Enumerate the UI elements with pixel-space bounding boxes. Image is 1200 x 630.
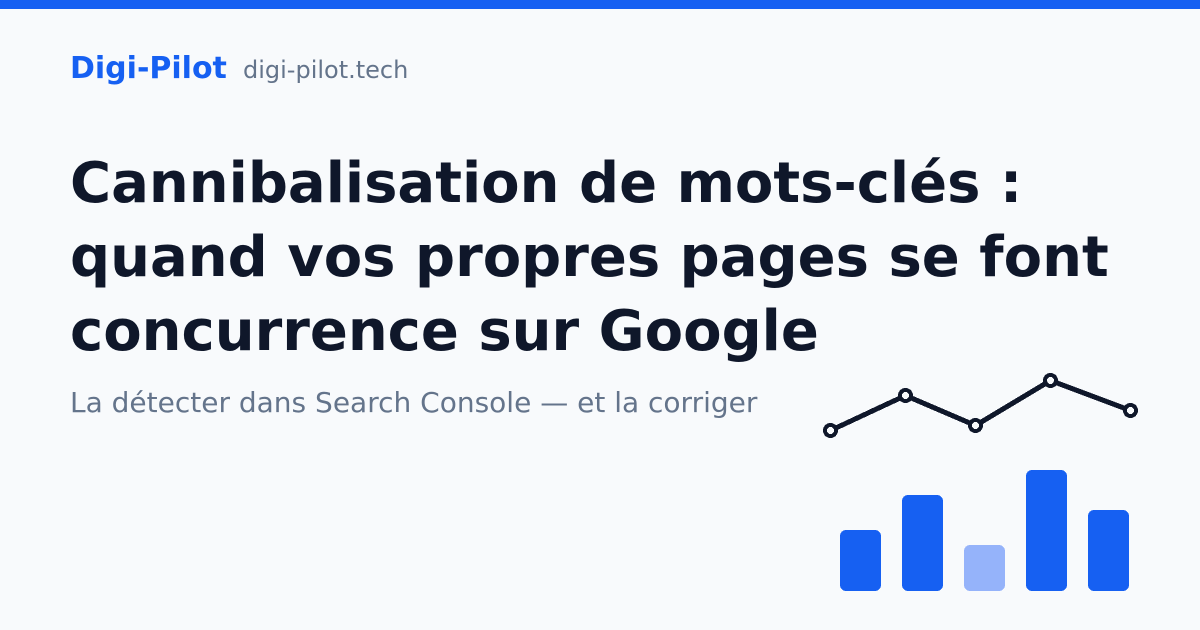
title: Cannibalisation de mots-clés : bbox=[70, 151, 1022, 216]
subtitle: La détecter dans Search Console — et la corriger bbox=[70, 386, 758, 419]
title: quand vos propres pages se font bbox=[70, 225, 1109, 290]
title: concurrence sur Google bbox=[70, 299, 819, 364]
top accent bar bbox=[0, 0, 1200, 9]
domain: digi-pilot.tech bbox=[243, 56, 408, 84]
brand header bbox=[70, 51, 408, 86]
line chart bbox=[825, 375, 1136, 436]
bar chart bbox=[840, 470, 1129, 591]
brand name: Digi-Pilot bbox=[70, 51, 227, 86]
